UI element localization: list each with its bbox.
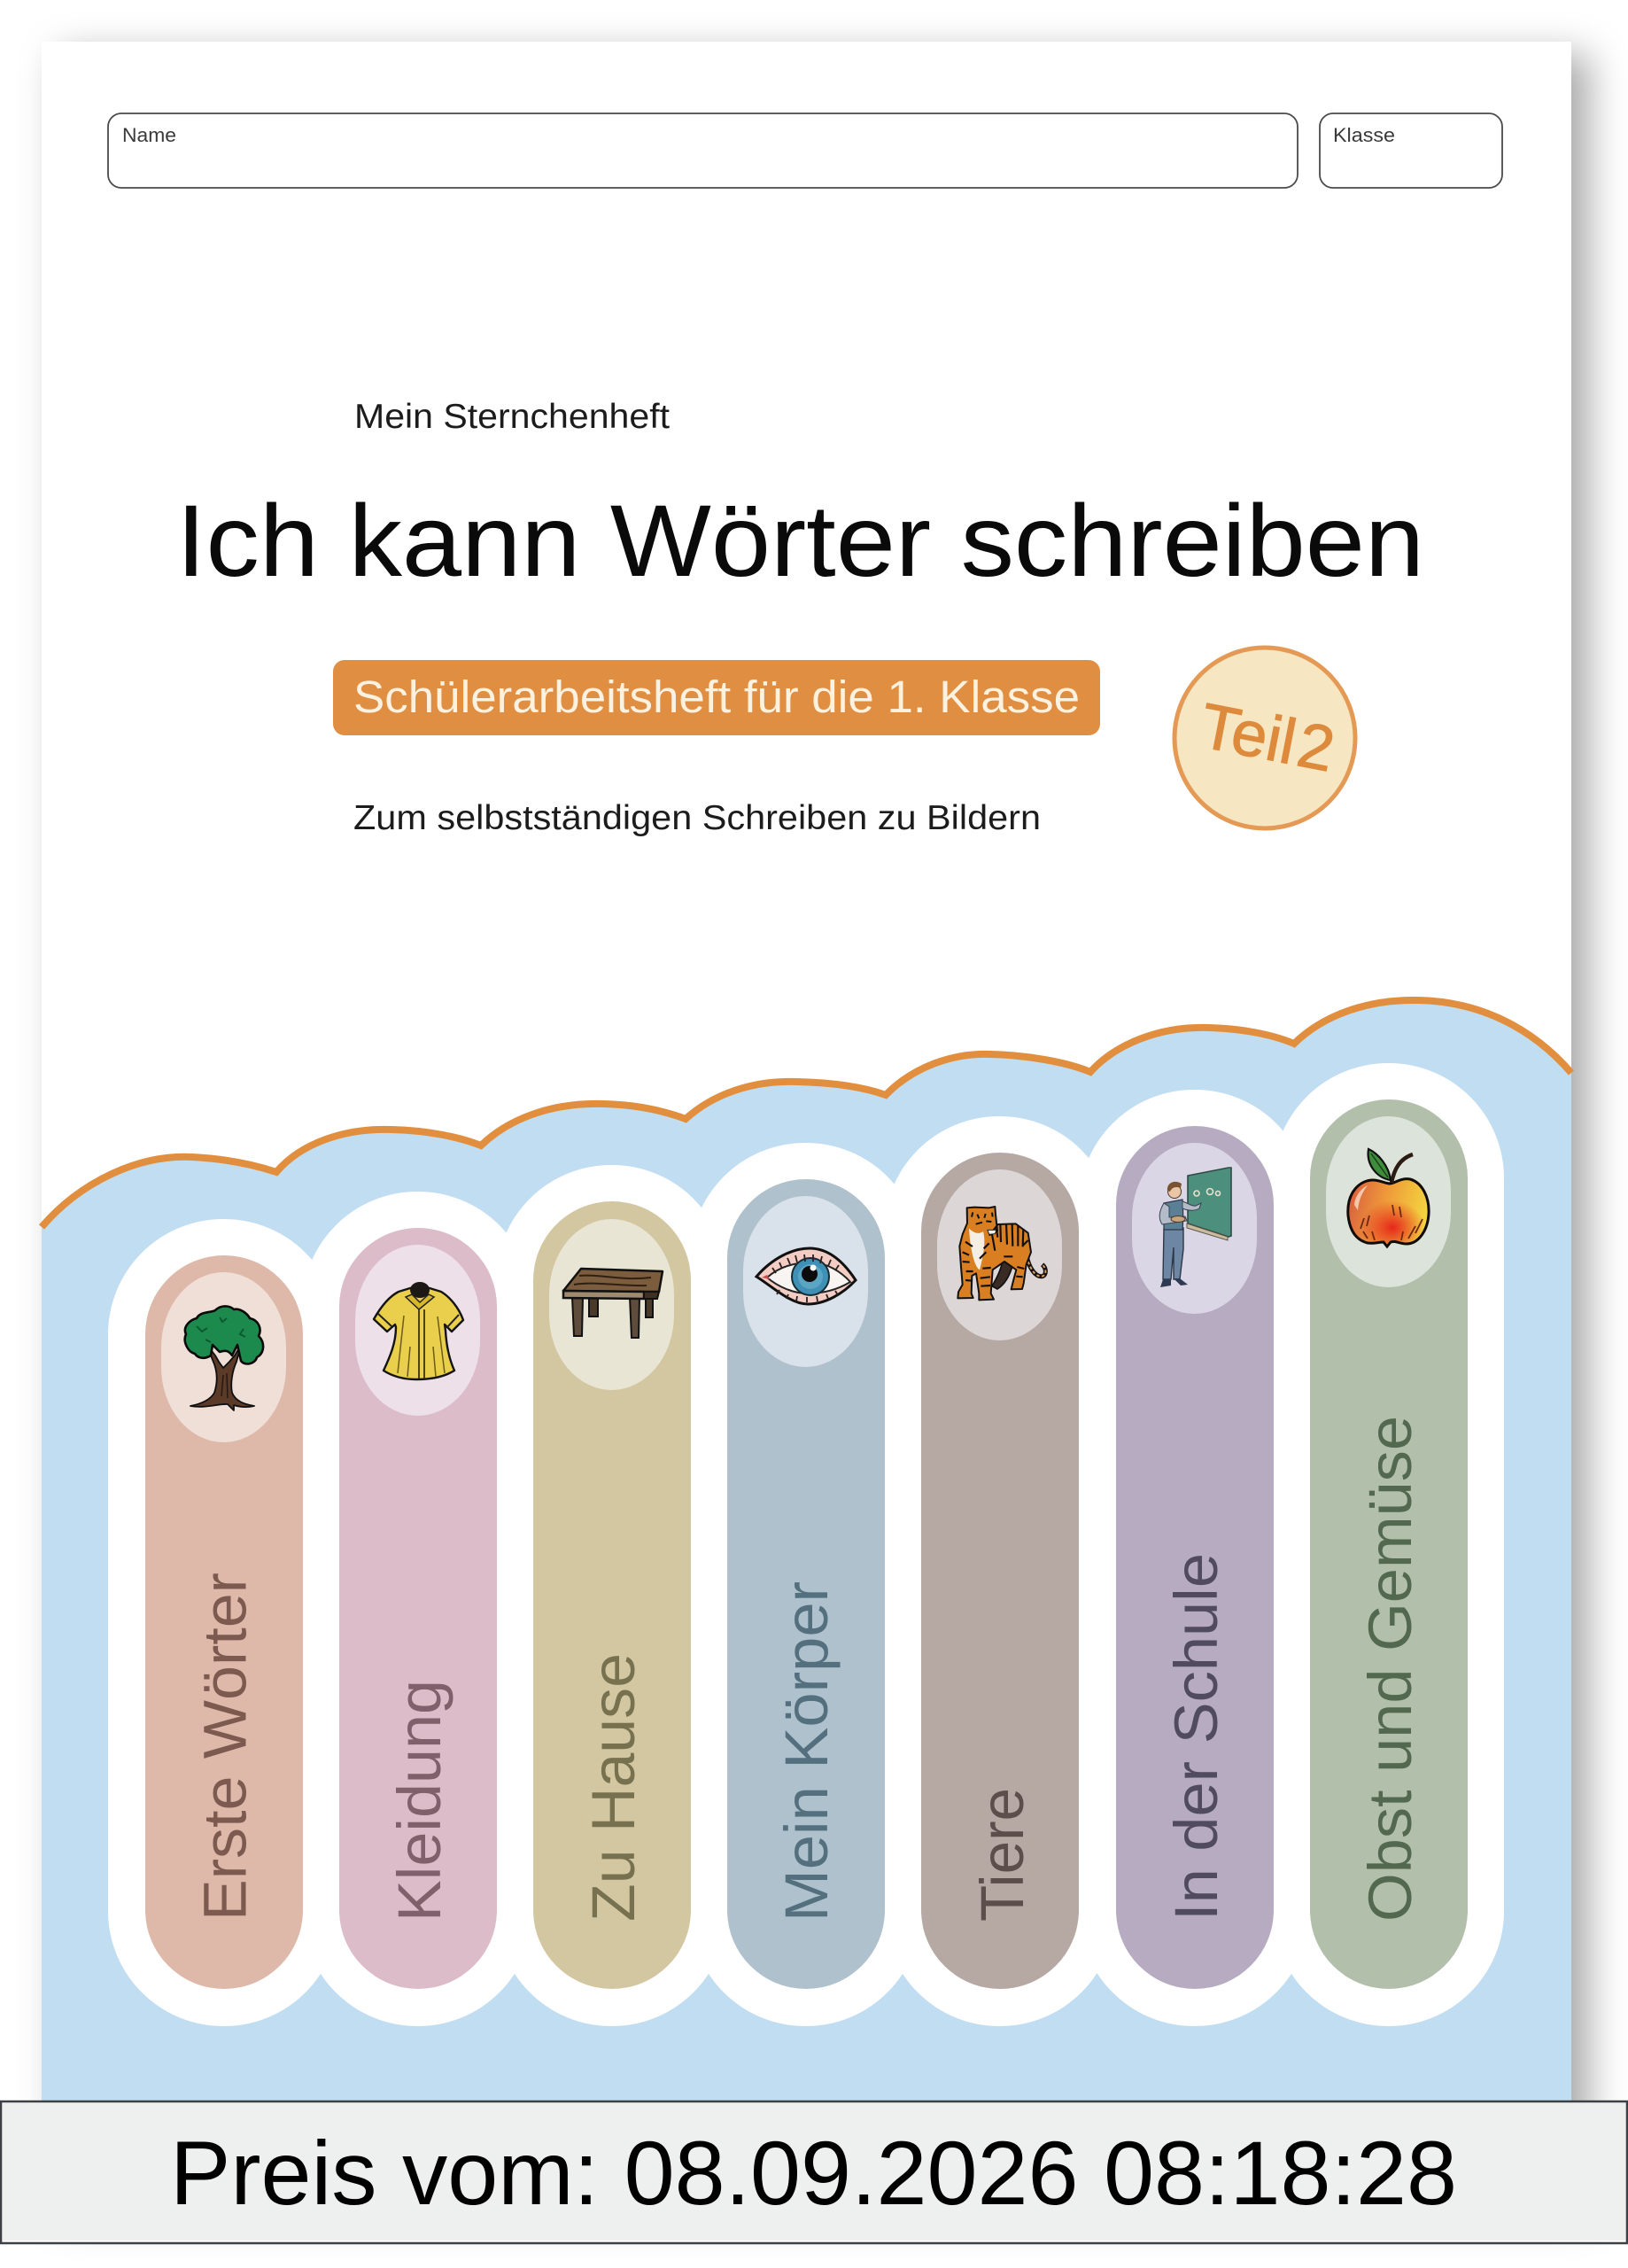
label: Kleidung: Kleidung: [385, 1680, 454, 1922]
panel: Tiere tab: [921, 1153, 1079, 1989]
name field: Name: [122, 124, 176, 146]
label: Mein Körper: Mein Körper: [772, 1581, 841, 1922]
label: Tiere: Tiere: [968, 1788, 1036, 1922]
tagline: Zum selbstständigen Schreiben zu Bildern: [353, 799, 1041, 837]
icon: shirt: [374, 1282, 463, 1379]
part badge: [1174, 648, 1355, 828]
title: Ich kann Wörter schreiben: [176, 485, 1424, 598]
label: In der Schule: In der Schule: [1162, 1553, 1230, 1921]
panel: Zu Hause tab: [533, 1201, 691, 1989]
label: Erste Wörter: Erste Wörter: [191, 1573, 259, 1921]
subtitle badge: Schülerarbeitsheft für die 1. Klasse: [353, 672, 1080, 722]
icon: tiger: [957, 1207, 1045, 1300]
panel: blue wave background: [42, 1000, 1571, 2109]
panel: Erste Wörter tab: [145, 1255, 303, 1989]
class field: [1320, 113, 1502, 188]
icon: eye: [756, 1248, 856, 1304]
panel: In der Schule tab: [1116, 1126, 1274, 1989]
part badge: Teil 2: [1195, 690, 1340, 786]
panel: Mein Körper tab: [727, 1179, 885, 1989]
panel: Obst und Gemüse tab: [1310, 1099, 1468, 1989]
name field: [108, 113, 1298, 188]
icon: table: [563, 1269, 663, 1338]
icon: apple: [1348, 1149, 1429, 1247]
panel: Kleidung tab: [339, 1228, 497, 1989]
icon: teacher at blackboard: [1159, 1168, 1231, 1287]
subtitle badge: [333, 660, 1100, 735]
price banner: [1, 2101, 1627, 2243]
icon: tree: [185, 1306, 263, 1410]
price banner: Preis vom: 08.09.2026 08:18:28: [170, 2123, 1457, 2224]
label: Zu Hause: Zu Hause: [579, 1653, 647, 1922]
class field: Klasse: [1333, 124, 1395, 146]
series label: Mein Sternchenheft: [354, 398, 670, 436]
white tab outlines: [108, 1063, 1504, 2026]
label: Obst und Gemüse: Obst und Gemüse: [1356, 1416, 1424, 1922]
